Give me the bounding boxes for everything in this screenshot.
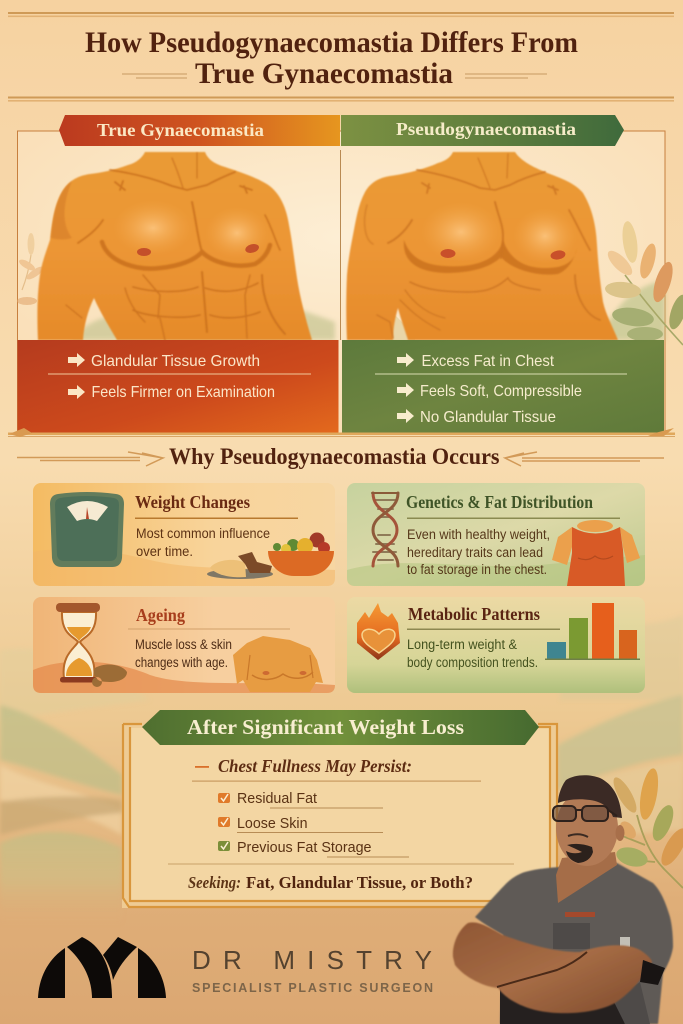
card: ageing: Ageing [136,605,185,625]
card: metabolic patterns [347,597,645,693]
card: weight changes: Most common influence [136,526,270,541]
arrow: left ornament [17,452,163,466]
banner [142,710,539,745]
arrow: glandular growth [68,353,85,367]
item: previous fat storage [218,839,409,858]
item: loose skin: Loose Skin [237,815,308,832]
card: weight changes [33,483,335,586]
item: previous fat storage: Previous Fat Storage [237,839,372,856]
icon: hourglass [56,603,100,682]
card: ageing [33,597,335,693]
card: genetics and fat distribution: hereditary traits can lead [407,545,543,560]
card: genetics and fat distribution: Genetics & Fat Distribution [406,492,593,512]
arms [453,922,652,1013]
logo mark [38,937,166,998]
section heading: Why Pseudogynaecomastia Occurs [169,444,500,469]
decorative leaves: right of panel [604,220,683,345]
illustration: muscular torso [37,152,312,340]
icon: bathroom scale [50,492,124,567]
panel: after significant weight loss [122,710,558,908]
ribbon: pseudogynaecomastia [341,115,624,146]
ribbon: true gynaecomastia: True Gynaecomastia [97,120,264,140]
arrow: feels firmer [68,385,85,399]
card: metabolic patterns: Long-term weight & [407,637,517,652]
brand text [192,945,433,995]
card: genetics and fat distribution: Even with healthy weight, [407,527,550,542]
subheading: Chest Fullness May Persist: [218,756,412,776]
panel: true gynaecomastia features: Glandular Tissue Growth [91,353,260,370]
card: weight changes: over time. [136,544,193,559]
question: Seeking: [188,873,241,892]
panel: true gynaecomastia features: Feels Firmer on Examination [92,384,275,401]
panel bottom trim [8,428,675,437]
banner: After Significant Weight Loss [187,715,464,739]
card: metabolic patterns: body composition trends. [407,655,538,670]
frame [123,724,557,907]
item: residual fat [218,790,383,808]
brand text: DR MISTRY [192,945,432,975]
head [556,790,618,866]
card: ageing: changes with age. [135,655,228,670]
ribbon: true gynaecomastia [59,115,340,146]
header rules [8,12,674,102]
icon: dna helix [372,493,398,566]
card: metabolic patterns: Metabolic Patterns [408,604,540,624]
arrow: excess fat [397,353,414,367]
panel: true gynaecomastia features [18,340,338,432]
scrubs [475,863,673,1024]
goatee [566,844,593,863]
icon: food bowl and plate [207,532,334,579]
neck [556,852,617,903]
illustration: fuller torso [346,152,618,340]
bar chart [545,603,640,660]
background hills [0,615,683,925]
panel: pseudogynaecomastia features: Excess Fat in Chest [422,353,555,370]
icon: torso in tank top [552,520,640,586]
card: genetics and fat distribution [347,483,645,586]
card: weight changes: Weight Changes [135,492,250,512]
item: loose skin [218,815,383,833]
decorative leaves: behind doctor [609,767,683,888]
panel: comparison frame [18,131,665,433]
cap [558,775,622,818]
icon: flaming heart [357,603,400,660]
checklist [218,790,409,858]
icon: ageing torso [233,636,323,692]
icon: stones [92,665,127,687]
brand text: SPECIALIST PLASTIC SURGEON [192,981,433,995]
title: True Gynaecomastia [195,57,453,90]
decorative leaves: left of panel [17,233,45,305]
doctor portrait [453,775,673,1024]
card: genetics and fat distribution: to fat storage in the chest. [407,562,547,577]
card: ageing: Muscle loss & skin [135,637,232,652]
arrow: feels soft [397,383,414,397]
ribbon: pseudogynaecomastia: Pseudogynaecomastia [396,119,576,139]
arrow: no glandular tissue [397,409,414,423]
item: residual fat: Residual Fat [237,790,318,807]
title: How Pseudogynaecomastia Differs From [85,26,578,59]
glasses [553,806,617,821]
panel: pseudogynaecomastia features: Feels Soft, Compressible [420,383,582,400]
arrow: right ornament [505,452,664,466]
pocket [553,923,590,949]
panel: pseudogynaecomastia features [342,340,664,432]
title [85,26,578,90]
question: Fat, Glandular Tissue, or Both? [246,873,473,892]
panel: pseudogynaecomastia features: No Glandular Tissue [420,409,556,426]
section heading [17,444,664,469]
